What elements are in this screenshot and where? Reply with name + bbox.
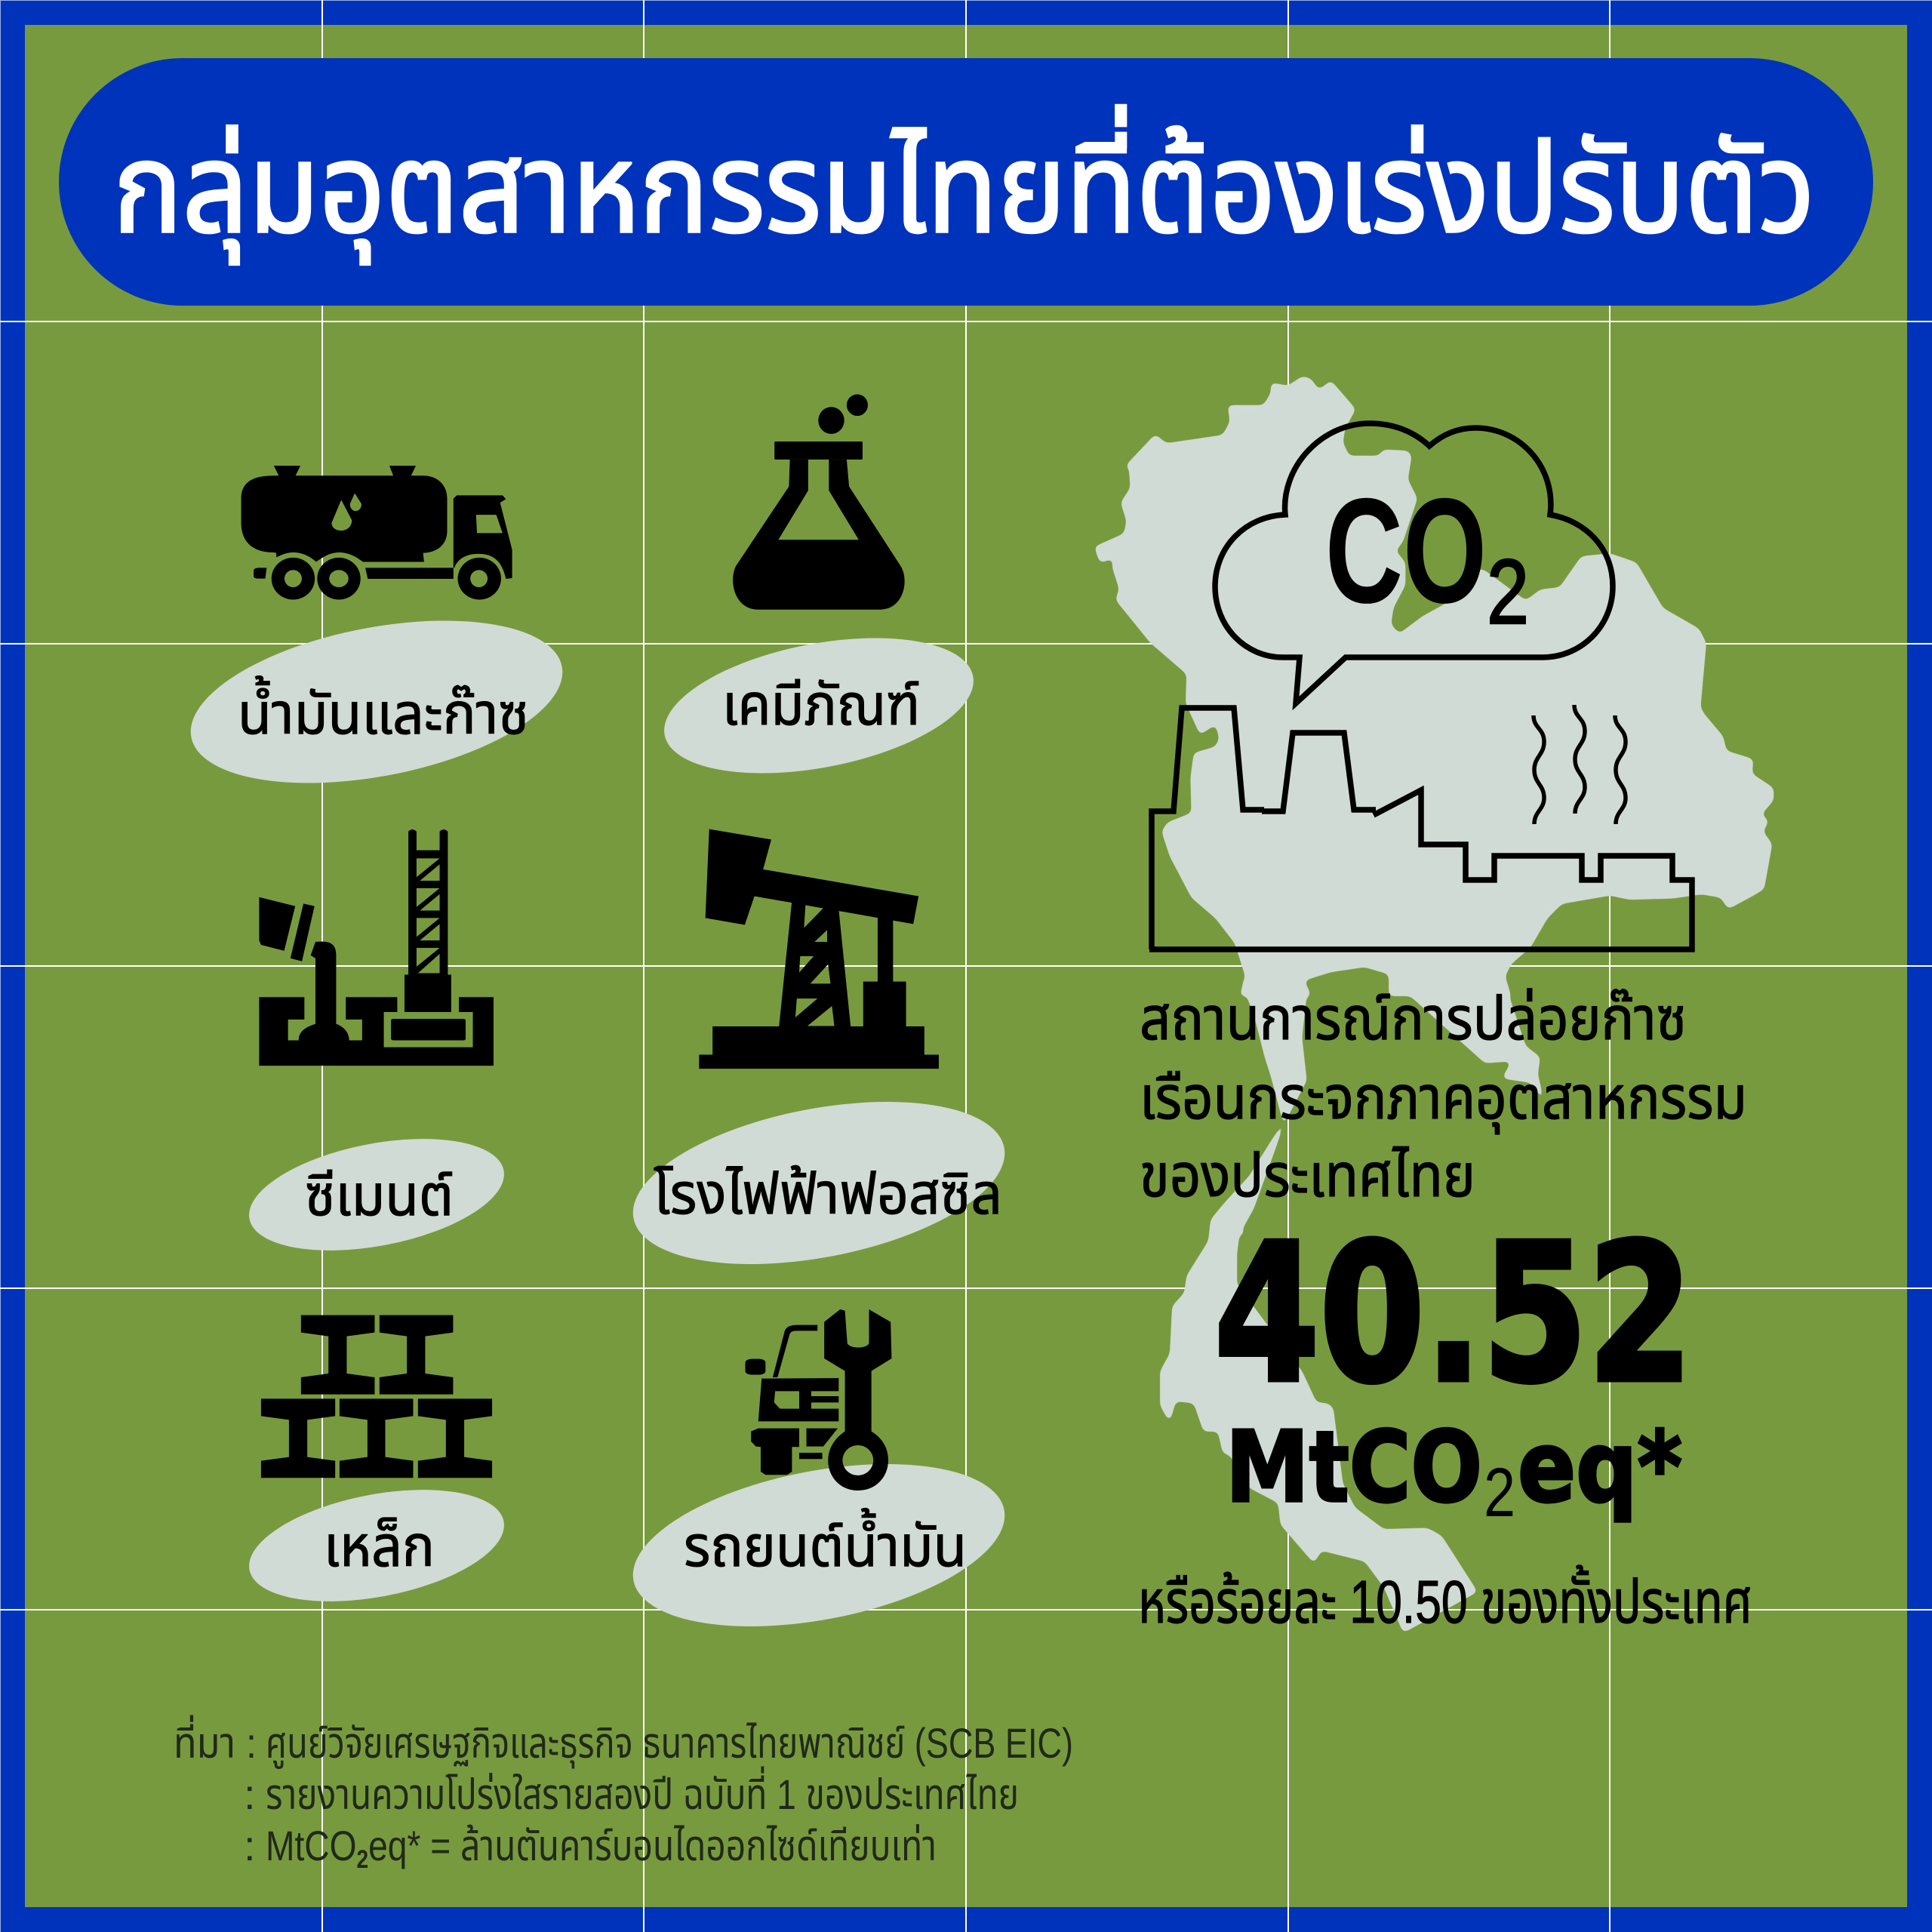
unit: MtCO2eq (1226, 1410, 1682, 1531)
ellipses behind labels (177, 593, 1018, 1654)
text block: emissions description: ของประเทศไทย (1140, 1142, 1475, 1209)
source notes: ที่มา : (174, 1715, 257, 1767)
icon: steel beams (261, 1315, 492, 1478)
source notes: : (244, 1770, 256, 1818)
icon: CO2 speech cloud (1215, 423, 1613, 703)
icon: CO2 speech cloud: 2 (1487, 540, 1529, 643)
title banner (59, 58, 1873, 306)
icon: oil tanker truck (242, 466, 512, 600)
big number: 40.52 (1214, 1204, 1693, 1425)
map of Thailand (1094, 376, 1774, 1633)
unit: MtCO2eq: eq* (1518, 1410, 1682, 1524)
source notes: eq* = ล้านตันคาร์บอนไดออกไซด์เทียบเท่า (368, 1822, 937, 1869)
source notes: รายงานความโปร่งใสรายสองปี ฉบับที่ 1 ของประเทศไทย (266, 1766, 1019, 1818)
icon: CO2 speech cloud: CO (1325, 467, 1487, 634)
label: combustion cars: รถยนต์น้ำมัน (684, 1508, 967, 1579)
label: steel: เหล็ก (324, 1515, 435, 1579)
source notes (174, 1715, 1073, 1874)
unit: MtCO2eq: 2 (1484, 1454, 1515, 1531)
icon: chemical flask (733, 394, 905, 610)
text block: emissions description: เรือนกระจกภาคอุตสาหกรรม (1140, 1064, 1747, 1134)
unit: MtCO2eq: MtCO (1226, 1410, 1482, 1524)
text: share of national emissions: หรือร้อยละ 10.50 ของทั้งประเทศ (1138, 1565, 1752, 1635)
source notes: : (244, 1822, 256, 1869)
label: cement: ซีเมนต์ (305, 1164, 454, 1228)
source notes: ศูนย์วิจัยเศรษฐกิจและธุรกิจ ธนาคารไทยพาณิชย์ (SCB EIC) (266, 1719, 1073, 1769)
source notes: 2 (357, 1845, 368, 1874)
label: fossil power plants: โรงไฟฟ้าฟอสซิล (654, 1162, 1002, 1226)
icon: car and wrench (746, 1309, 891, 1491)
icon: cement plant (259, 829, 494, 1066)
text block: emissions description: สถานการณ์การปล่อยก๊าซ (1140, 985, 1687, 1052)
source notes: MtCO (266, 1822, 376, 1869)
label: oil and gas: น้ำมันและก๊าซ (238, 675, 529, 746)
title text: กลุ่มอุตสาหกรรมไทยที่ต้องเร่งปรับตัว (113, 105, 1815, 264)
icon: factory outline (1149, 705, 1692, 949)
icon: oil pumpjack (699, 829, 939, 1069)
text block: emissions description (1140, 985, 1747, 1209)
label: chemicals: เคมีภัณฑ์ (722, 673, 920, 737)
